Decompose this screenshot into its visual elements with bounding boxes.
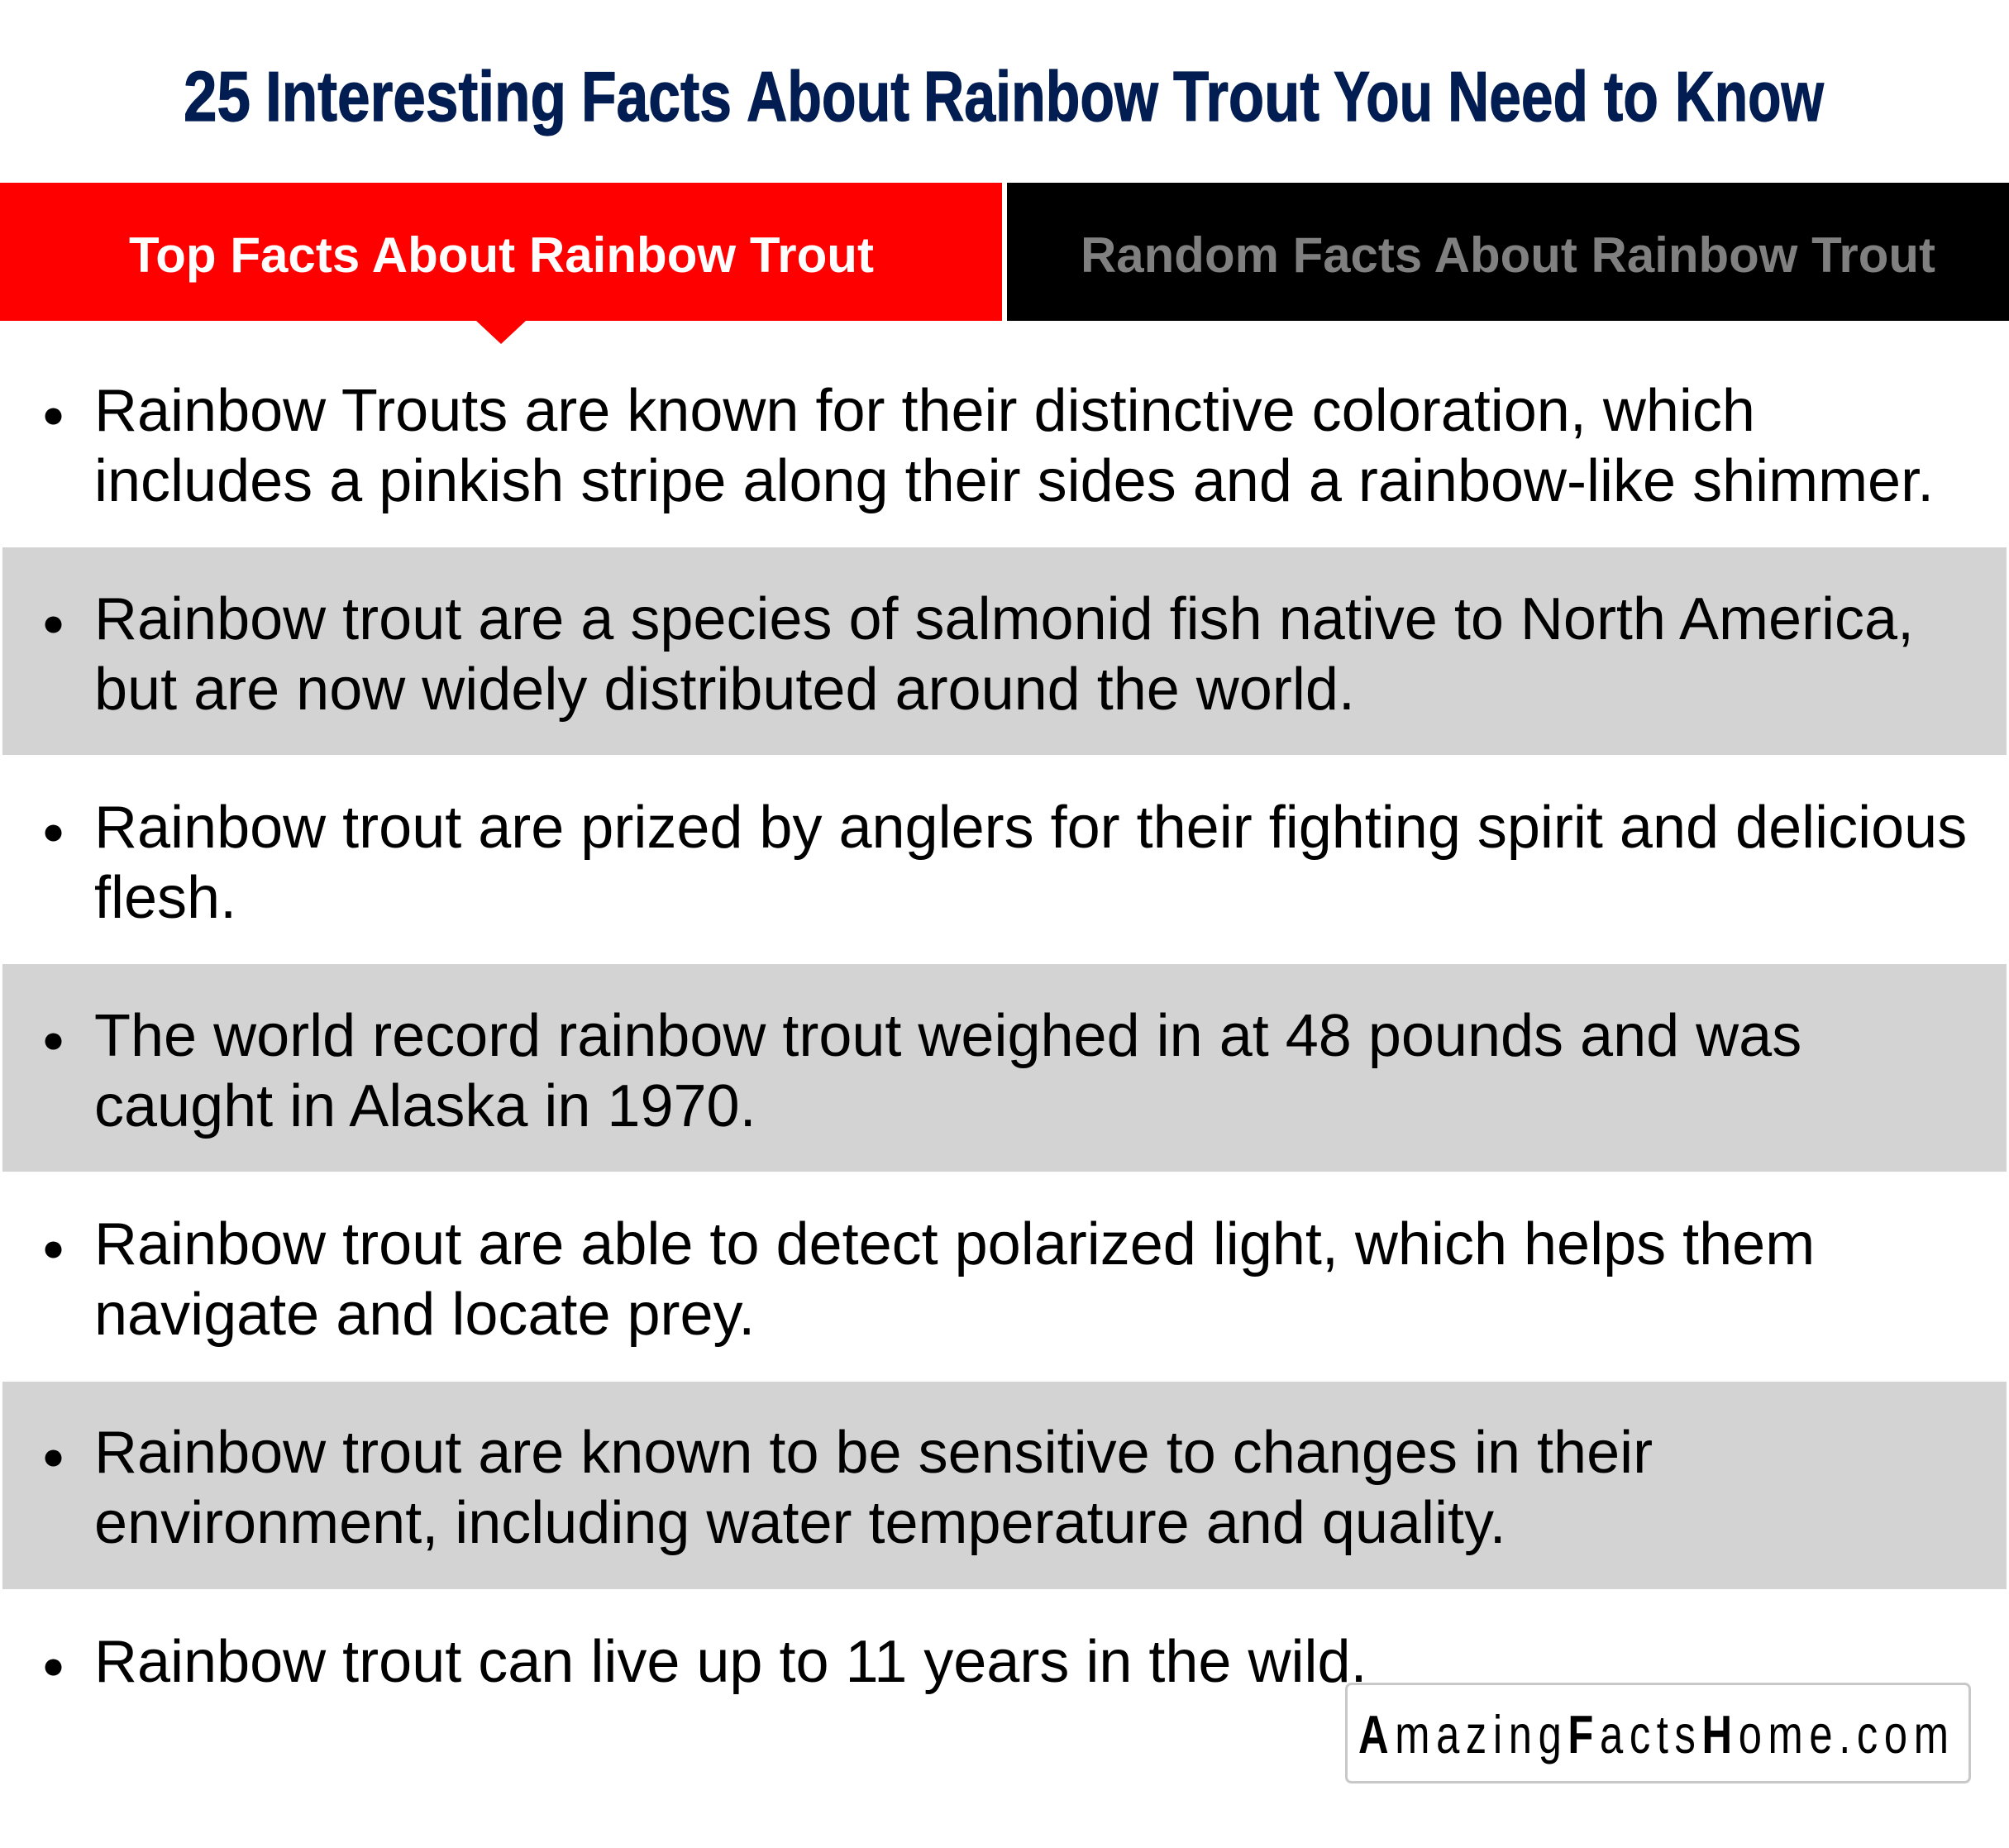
fact row 2: but are now widely distributed around the world. — [94, 657, 1355, 723]
title: Trout — [1173, 58, 1319, 136]
fact row 2: Rainbow trout are a species of salmonid fish native to North America, — [94, 586, 1914, 652]
title: Need — [1448, 58, 1588, 136]
fact row 4: caught in Alaska in 1970. — [94, 1073, 756, 1139]
fact row 5: navigate and locate prey. — [94, 1282, 755, 1348]
fact row 1: includes a pinkish stripe along their sides and a rainbow-like shimmer. — [94, 448, 1934, 514]
title — [184, 58, 1825, 136]
fact row 3: flesh. — [94, 865, 236, 931]
title: Interesting — [265, 58, 566, 136]
title: About — [747, 58, 909, 136]
fact row 6 — [2, 1382, 2007, 1589]
title: Facts — [581, 58, 732, 136]
title: You — [1334, 58, 1433, 136]
tab: random facts (inactive) — [1007, 183, 2009, 321]
fact row 6: Rainbow trout are known to be sensitive to changes in their — [94, 1420, 1653, 1486]
fact row 2 — [2, 547, 2007, 755]
fact row 1 — [45, 378, 1934, 514]
title: Know — [1675, 58, 1825, 136]
tab: top facts (active) — [0, 183, 1002, 344]
title: to — [1604, 58, 1658, 136]
fact row 6: environment, including water temperature and quality. — [94, 1490, 1506, 1556]
fact row 3 — [45, 795, 1967, 931]
tab label: top facts: Top Facts About Rainbow Trout — [129, 227, 874, 283]
watermark badge — [1346, 1683, 1969, 1783]
title: 25 — [184, 58, 251, 136]
fact row 3: Rainbow trout are prized by anglers for their fighting spirit and delicious — [94, 795, 1967, 861]
fact row 1: Rainbow Trouts are known for their distinctive coloration, which — [94, 378, 1755, 444]
title: Rainbow — [923, 58, 1159, 136]
watermark text: AmazingFactsHome.com — [1358, 1705, 1954, 1764]
tab label: random facts: Random Facts About Rainbow Trout — [1081, 227, 1935, 283]
fact row 4: The world record rainbow trout weighed in at 48 pounds and was — [94, 1003, 1801, 1069]
fact row 4 — [2, 964, 2007, 1172]
fact row 5 — [45, 1211, 1815, 1348]
fact row 5: Rainbow trout are able to detect polarized light, which helps them — [94, 1211, 1815, 1277]
fact row 7: Rainbow trout can live up to 11 years in the wild. — [94, 1629, 1367, 1695]
